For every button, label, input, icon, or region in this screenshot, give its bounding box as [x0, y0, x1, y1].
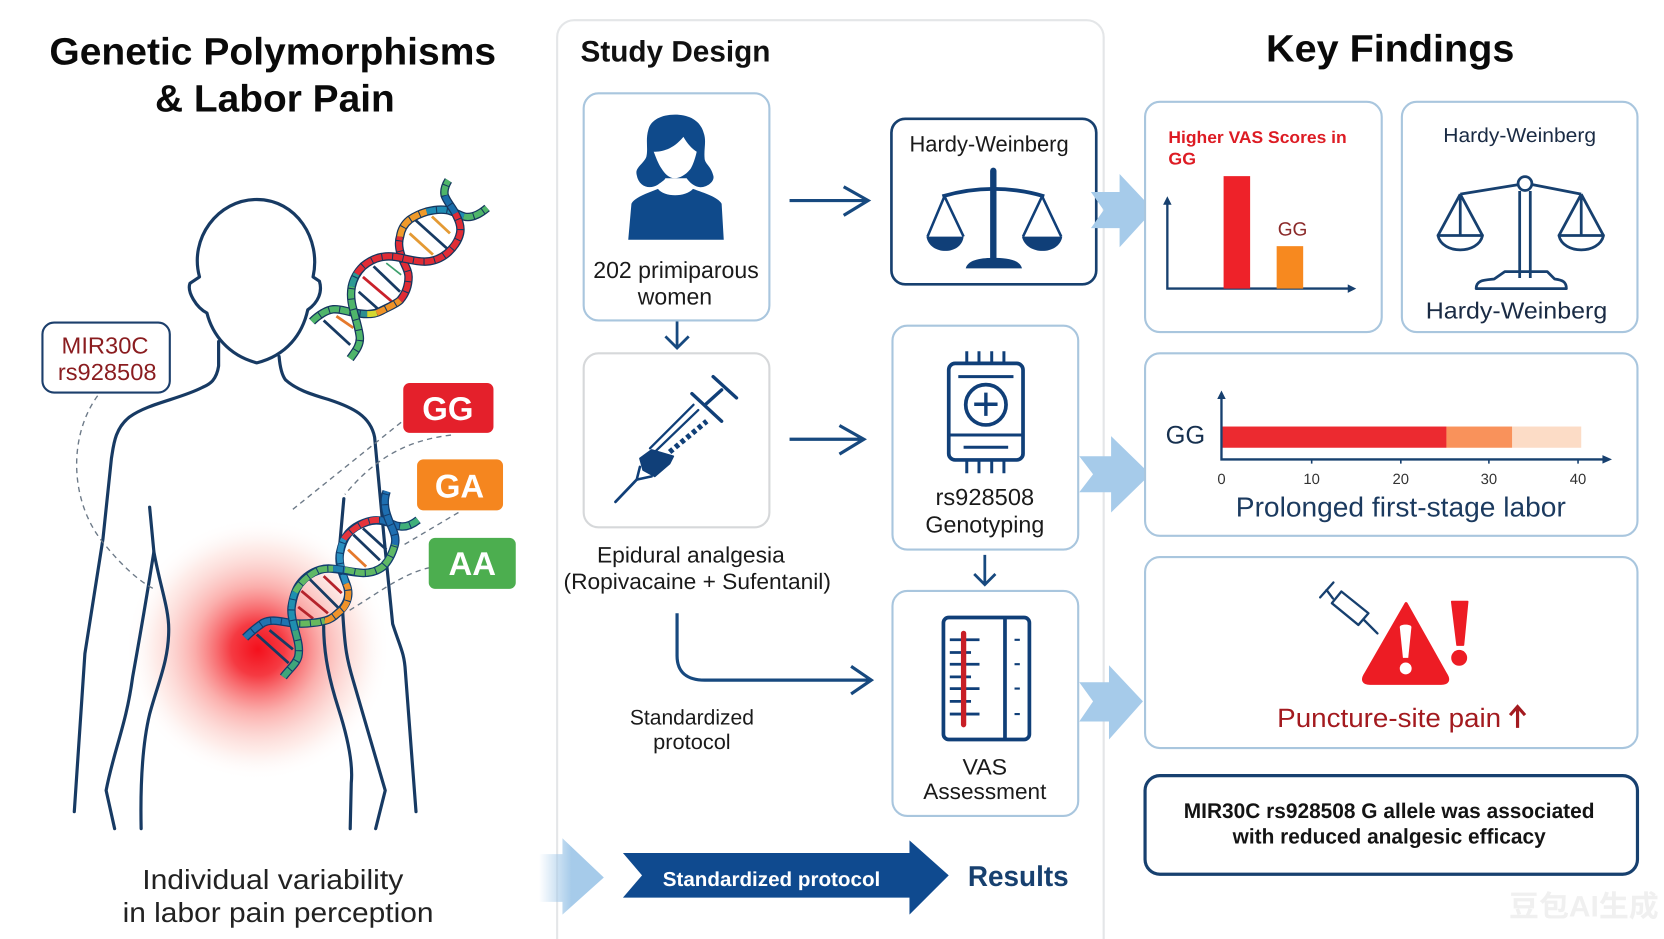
card: syringe: [584, 353, 769, 527]
bar chart: [1163, 176, 1356, 293]
card: VAS bar chart: [1145, 102, 1382, 332]
card: VAS assessment: Assessment: [923, 780, 1047, 804]
card: Hardy-Weinberg test: Hardy-Weinberg: [909, 133, 1069, 157]
text: epidural analgesia: [564, 543, 831, 594]
stacked bar chart: GG: [1166, 421, 1205, 450]
icon: lower DNA helix: [245, 491, 418, 677]
stacked bar chart: 20: [1393, 470, 1409, 487]
card: genotyping: rs928508: [935, 484, 1034, 510]
arrow: to Hardy-Weinberg: [790, 187, 868, 215]
badge: GG: [403, 383, 493, 433]
text: results: Results: [968, 860, 1069, 892]
arrow: to genotyping: [790, 425, 864, 454]
card: VAS bar chart: Higher VAS Scores in: [1168, 129, 1347, 147]
card: participants: [584, 93, 769, 320]
badge: GA: GA: [435, 468, 484, 505]
icon: warning triangle: [1364, 602, 1468, 683]
icon: woman: [628, 115, 724, 240]
card: VAS assessment: VAS: [963, 755, 1007, 780]
card: Hardy-Weinberg result: Hardy-Weinberg: [1426, 297, 1607, 324]
callout: conclusion: MIR30C rs928508 G allele was associated: [1184, 800, 1594, 823]
card: VAS assessment: [892, 591, 1078, 816]
card: Hardy-Weinberg result: Hardy-Weinberg: [1443, 125, 1596, 147]
text: standardized protocol note: protocol: [653, 731, 731, 754]
arrow: to VAS findings: [1091, 174, 1154, 247]
arrow: faded blue into protocol: [539, 838, 604, 915]
panel: key findings: [1145, 27, 1637, 874]
card: prolonged labor chart: Prolonged first-stage labor: [1236, 491, 1566, 523]
card: participants: 202 primiparous: [593, 257, 759, 283]
stacked bar chart: 10: [1303, 470, 1320, 487]
label: MIR30C rs928508: MIR30C: [62, 332, 149, 359]
caption: individual variability: [123, 864, 434, 928]
icon: upper DNA helix: [312, 180, 487, 359]
badge: GG: GG: [422, 390, 473, 428]
badge: AA: [429, 538, 516, 589]
icon: chip: [949, 351, 1023, 473]
badge: GA: [417, 459, 503, 510]
callout: conclusion: [1145, 776, 1637, 874]
icon: syringe: [616, 377, 736, 502]
title: [49, 30, 496, 120]
caption: individual variability: Individual variability: [142, 864, 403, 895]
card: VAS bar chart: GG: [1168, 151, 1196, 169]
panel: study design: [539, 20, 1104, 939]
icon: small syringe: [1320, 582, 1377, 633]
card: participants: women: [637, 283, 712, 310]
label: MIR30C rs928508: [42, 323, 170, 393]
arrow: genotyping to VAS: [974, 555, 995, 585]
text: epidural analgesia: (Ropivacaine + Sufentanil): [564, 570, 831, 594]
arrow: to labor findings: [1079, 436, 1150, 512]
stacked bar chart: 40: [1570, 470, 1587, 487]
arrow: to puncture findings: [1079, 665, 1143, 740]
arrow: standardized protocol banner: [623, 840, 949, 915]
title: Genetic Polymorphisms: [49, 30, 496, 73]
card: puncture-site pain: [1145, 557, 1637, 748]
arrow: standardized protocol banner: Standardized protocol: [663, 869, 880, 891]
card: Hardy-Weinberg result: [1402, 102, 1637, 332]
heading: key findings: Key Findings: [1266, 27, 1514, 70]
heading: study design: Study Design: [580, 35, 770, 68]
icon: VAS scale: [943, 618, 1029, 740]
title: & Labor Pain: [155, 76, 395, 120]
callout: conclusion: with reduced analgesic efficacy: [1232, 825, 1547, 849]
badge: AA: AA: [448, 545, 496, 582]
stacked bar chart: 0: [1217, 470, 1226, 487]
icon: balance scale: [926, 171, 1062, 268]
card: puncture-site pain: Puncture-site pain: [1277, 703, 1501, 733]
arrow: to VAS assessment: [677, 613, 871, 694]
dashed leader lines: [77, 396, 458, 611]
text: standardized protocol note: Standardized: [630, 707, 754, 730]
body outline: [74, 199, 416, 829]
label: MIR30C rs928508: rs928508: [58, 359, 157, 385]
icon: up arrow: [1510, 707, 1525, 728]
bar chart: GG: [1278, 219, 1307, 240]
watermark: 豆包AI生成: [1509, 890, 1659, 923]
pain glow: [125, 518, 391, 781]
card: genotyping: [892, 326, 1078, 550]
caption: individual variability: in labor pain perception: [123, 897, 434, 928]
panel: genetic polymorphisms: [42, 30, 516, 928]
stacked bar chart: [1166, 390, 1612, 487]
card: Hardy-Weinberg test: [891, 119, 1096, 284]
card: genotyping: Genotyping: [925, 511, 1044, 538]
arrow: down to epidural: [665, 321, 689, 348]
card: prolonged labor chart: [1145, 353, 1637, 536]
text: epidural analgesia: Epidural analgesia: [597, 543, 785, 568]
icon: outline balance scale: [1438, 177, 1604, 289]
stacked bar chart: 30: [1481, 470, 1497, 487]
text: standardized protocol note: [630, 707, 754, 754]
